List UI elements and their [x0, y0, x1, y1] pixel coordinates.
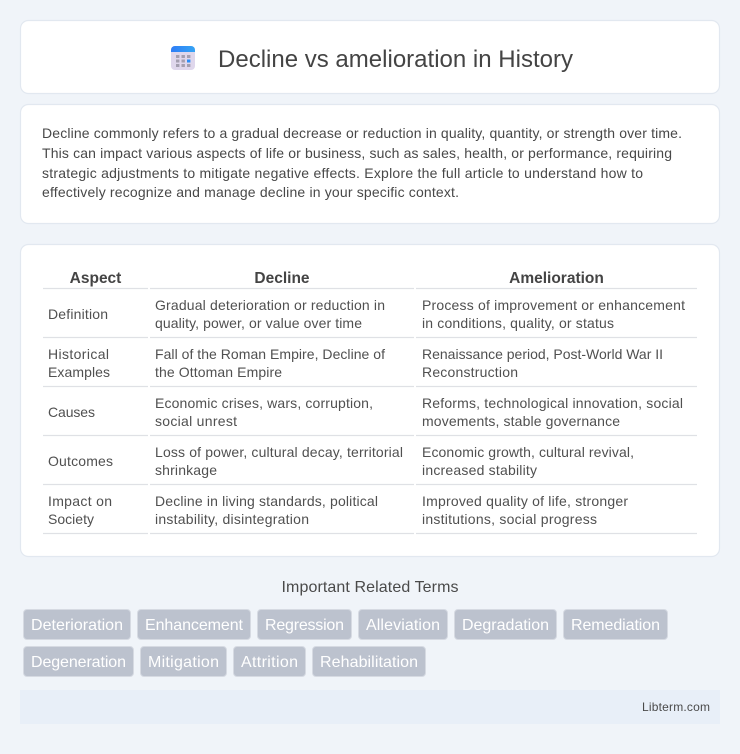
row: impact on society: Impact on	[48, 493, 112, 509]
row: impact on society: Improved quality of life, stronger	[422, 493, 628, 509]
row: outcomes	[48, 444, 634, 478]
title: Decline vs amelioration in History	[218, 46, 573, 73]
footer	[20, 690, 720, 724]
tag: Enhancement: Enhancement	[145, 617, 244, 634]
tag: Degeneration	[24, 646, 134, 676]
tag: Degradation	[454, 610, 556, 640]
panel: comparison table	[20, 244, 720, 556]
tag: Degeneration: Degeneration	[31, 654, 126, 671]
heading: related terms: Important Related Terms	[282, 579, 458, 596]
row: outcomes: Outcomes	[48, 453, 113, 469]
row: impact on society: Society	[48, 511, 94, 527]
row: outcomes: Economic growth, cultural revival,	[422, 444, 634, 460]
table header: Aspect	[70, 270, 121, 287]
tag: Regression: Regression	[265, 617, 344, 634]
tag: Degradation: Degradation	[462, 617, 549, 634]
row: outcomes: Loss of power, cultural decay, territorial	[155, 444, 403, 460]
row: causes: social unrest	[155, 413, 237, 429]
row: definition: quality, power, or value over time	[155, 315, 362, 331]
tag: Attrition	[234, 646, 306, 676]
row: causes: Reforms, technological innovation, social	[422, 395, 683, 411]
row: causes	[48, 395, 683, 429]
tag: Attrition: Attrition	[241, 654, 298, 671]
row: outcomes: shrinkage	[155, 462, 217, 478]
row: causes: Economic crises, wars, corruption,	[155, 395, 373, 411]
tag: Rehabilitation: Rehabilitation	[320, 654, 418, 671]
row: definition	[48, 297, 685, 331]
tag: Deterioration	[24, 610, 130, 640]
row: definition: Process of improvement or enhancement	[422, 297, 685, 313]
row: impact on society: institutions, social progress	[422, 511, 597, 527]
table header: Decline	[254, 270, 310, 287]
related term tags	[24, 610, 668, 676]
text block: introduction: Decline commonly refers to a gradual decrease or reduction in quality, quantity, or strength over time.	[42, 125, 682, 141]
tag: Alleviation: Alleviation	[366, 617, 440, 634]
row: historical examples: Fall of the Roman Empire, Decline of	[155, 346, 385, 362]
tag: Enhancement	[138, 610, 250, 640]
row: outcomes: increased stability	[422, 462, 537, 478]
row: impact on society	[48, 493, 628, 527]
row: historical examples: Reconstruction	[422, 364, 518, 380]
tag: Alleviation	[358, 610, 448, 640]
row: historical examples: Historical	[48, 346, 109, 362]
row: impact on society: instability, disintegration	[155, 511, 309, 527]
footer text: Libterm.com: Libterm.com	[642, 700, 710, 714]
row: historical examples: the Ottoman Empire	[155, 364, 282, 380]
tag: Mitigation	[140, 646, 226, 676]
tag: Deterioration: Deterioration	[31, 617, 123, 634]
row: definition: Definition	[48, 306, 108, 322]
row: causes: movements, stable governance	[422, 413, 620, 429]
row: causes: Causes	[48, 404, 95, 420]
tag: Remediation	[564, 610, 668, 640]
panel: introduction	[20, 104, 720, 224]
tag: Mitigation: Mitigation	[148, 654, 219, 671]
icon: calendar	[171, 46, 195, 70]
text block: introduction: This can impact various aspects of life or business, such as sales, health, or performance, requiring	[42, 145, 672, 161]
table header: Amelioration	[509, 270, 604, 287]
row: definition: Gradual deterioration or reduction in	[155, 297, 385, 313]
tag: Remediation: Remediation	[571, 617, 660, 634]
row: definition: in conditions, quality, or status	[422, 315, 614, 331]
row: historical examples: Renaissance period, Post-World War II	[422, 346, 663, 362]
tag: Regression	[258, 610, 352, 640]
row: historical examples: Examples	[48, 364, 110, 380]
tag: Rehabilitation	[312, 646, 426, 676]
panel: title card	[20, 20, 720, 94]
table header	[70, 270, 604, 287]
text block: introduction: effectively recognize and manage decline in your specific context.	[42, 184, 459, 200]
row: historical examples	[48, 346, 663, 380]
row: impact on society: Decline in living standards, political	[155, 493, 378, 509]
text block: introduction: strategic adjustments to mitigate negative effects. Explore the full article to understand how to	[42, 165, 643, 181]
